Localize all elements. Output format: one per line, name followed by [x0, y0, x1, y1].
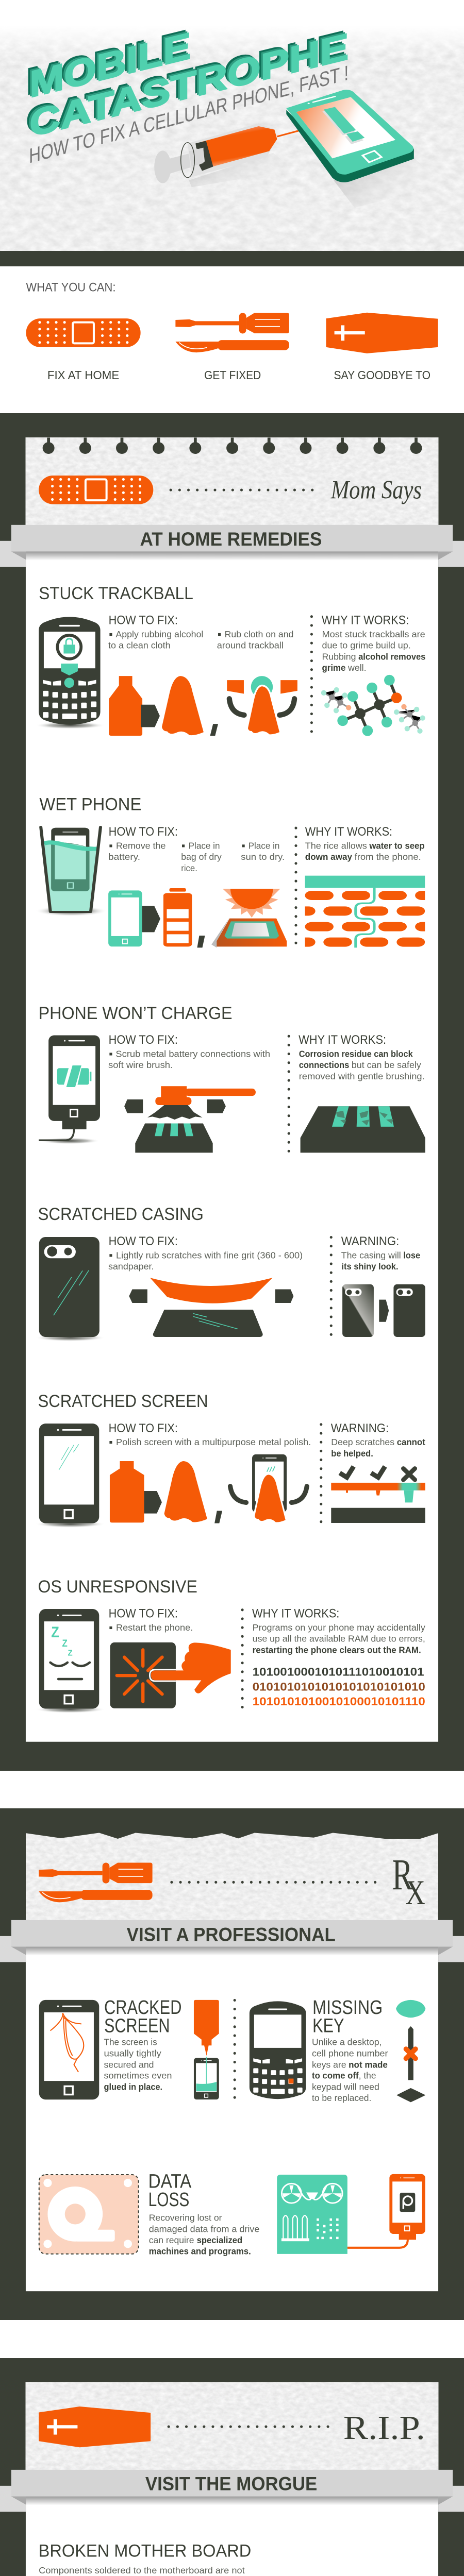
icon: sleeping phone: Z	[51, 1624, 59, 1641]
body text: sometimes even	[104, 2071, 172, 2081]
rx symbol: R	[392, 1850, 413, 1899]
why it works: alcohol removes	[358, 652, 425, 662]
how to fix: Rub cloth on and	[225, 629, 293, 639]
heading: DATA	[148, 2171, 192, 2192]
hero title and illustration	[26, 22, 438, 527]
icon: sandpaper	[129, 1278, 293, 1337]
why it works	[322, 614, 425, 673]
body text: keypad will need	[312, 2081, 379, 2092]
panel texture and sheet	[26, 2382, 438, 2576]
icon: corroded contacts	[301, 1106, 425, 1153]
icon: coffin	[326, 313, 438, 353]
option labels	[47, 368, 430, 382]
icon: orange phone with drive	[389, 2174, 425, 2240]
section group: scratched screen and OS unresponsive	[26, 1392, 438, 1922]
body text: machines and programs.	[149, 2246, 251, 2256]
warning: WARNING:	[331, 1421, 389, 1435]
divider	[309, 617, 314, 733]
warning	[341, 1234, 420, 1272]
how to fix: HOW TO FIX:	[109, 614, 178, 628]
panel: visit a professional	[0, 1850, 464, 2291]
section: data loss	[39, 2171, 425, 2256]
how to fix: HOW TO FIX:	[109, 1421, 178, 1435]
body text: Recovering lost or	[149, 2213, 222, 2223]
banner	[0, 525, 464, 567]
panel: at home remedies	[0, 476, 464, 1742]
why it works: grime	[322, 663, 346, 673]
icon: scratched back of phone	[35, 1237, 105, 1342]
icon: blackberry with lock	[35, 617, 105, 729]
why it works: water to seep	[369, 840, 425, 851]
rx symbol: X	[405, 1873, 425, 1912]
section: scratched screen	[35, 1392, 425, 1528]
title: Mobile Catastrophe: MOBILE	[29, 25, 191, 106]
icon: polish and cloth	[110, 1454, 307, 1523]
warning: Deep scratches	[331, 1437, 394, 1447]
option labels: GET FIXED	[204, 368, 261, 382]
heading	[312, 1997, 383, 2037]
how to fix: Polish screen with a multipurpose metal polish.	[116, 1437, 311, 1447]
mom says script: Mom Says	[330, 476, 422, 504]
icon: phone charging	[39, 1036, 100, 1144]
dotted leader	[172, 1880, 376, 1885]
section: cracked screen	[39, 1997, 219, 2099]
divider	[287, 1036, 291, 1152]
panel 1 white sheet	[26, 551, 438, 1742]
how to fix	[109, 1421, 311, 1447]
how to fix: rice.	[181, 863, 197, 873]
icon: key exploded	[396, 2000, 425, 2102]
icon: tools	[175, 313, 289, 352]
how to fix: sandpaper.	[108, 1261, 154, 1272]
section: phone won't charge	[39, 1004, 425, 1153]
why it works	[299, 1033, 425, 1081]
how to fix: HOW TO FIX:	[109, 1234, 178, 1248]
icon: blackberry missing key	[250, 2001, 306, 2099]
icon: tools	[39, 1862, 153, 1902]
icon: alcohol bottle and cloth	[109, 676, 297, 736]
section: OS unresponsive	[35, 1577, 425, 1713]
cable	[347, 2239, 408, 2248]
heading: MISSING	[312, 1997, 383, 2019]
icon: scratched phone	[35, 1423, 105, 1528]
heading: SCRATCHED CASING	[38, 1205, 204, 1224]
icon: remove battery	[108, 888, 205, 947]
hero background	[0, 0, 464, 251]
icon: bandage	[26, 318, 141, 347]
why it works: WHY IT WORKS:	[305, 825, 392, 839]
banner	[0, 1920, 464, 1962]
icon: hard drive	[39, 2175, 139, 2254]
body text	[312, 2037, 388, 2103]
title: Mobile Catastrophe: MOBILE	[26, 22, 187, 103]
rip: R.I.P.	[343, 2409, 425, 2447]
body text: glued in place.	[104, 2081, 162, 2092]
how to fix: Restart the phone.	[116, 1622, 193, 1633]
body text	[104, 2037, 172, 2092]
binary numbers: 1010010001010111010010101	[253, 1666, 424, 1679]
how to fix: bag of dry	[181, 852, 222, 862]
body text: Unlike a desktop,	[312, 2037, 382, 2047]
heading: SCRATCHED SCREEN	[38, 1392, 208, 1411]
title: Mobile Catastrophe: CATASTROPHE	[26, 23, 345, 142]
why it works: restarting the phone clears out the RAM.	[253, 1645, 421, 1655]
divider	[293, 828, 298, 943]
why it works: connections	[299, 1060, 349, 1070]
banner	[0, 2470, 464, 2512]
section: scratched casing	[35, 1205, 425, 1342]
banner title: VISIT A PROFESSIONAL	[127, 1924, 336, 1945]
dotted leader	[171, 488, 313, 493]
section: wet phone illustrations	[36, 827, 443, 947]
warning: cannot	[397, 1437, 425, 1447]
how to fix: around trackball	[217, 640, 284, 651]
heading: BROKEN MOTHER BOARD	[39, 2541, 251, 2561]
panel: visit the morgue	[0, 2382, 464, 2576]
how to fix	[108, 1234, 303, 1272]
how to fix: Lightly rub scratches with fine grit (360 - 600)	[116, 1250, 303, 1260]
heading: LOSS	[148, 2189, 189, 2211]
why it works: Corrosion residue can block	[299, 1048, 413, 1059]
how to fix	[108, 1033, 270, 1070]
title: Mobile Catastrophe: CATASTROPHE	[29, 25, 349, 145]
heading: KEY	[312, 2015, 344, 2037]
why it works	[252, 1607, 425, 1655]
option labels: FIX AT HOME	[47, 368, 119, 382]
body text: damaged data from a drive	[149, 2224, 259, 2234]
how to fix: Remove the	[116, 840, 166, 851]
body text: to come off	[312, 2071, 359, 2081]
how to fix: to a clean cloth	[108, 640, 171, 651]
divider	[233, 2000, 237, 2098]
binary numbers: 1010101010010100010101110	[253, 1695, 425, 1708]
how to fix: Place in	[248, 840, 279, 851]
warning: be helped.	[331, 1448, 373, 1459]
divider	[319, 1425, 323, 1522]
how to fix: HOW TO FIX:	[109, 825, 178, 839]
heading: OS UNRESPONSIVE	[38, 1577, 197, 1597]
how to fix: Place in	[189, 840, 220, 851]
section: stuck trackball	[35, 584, 425, 736]
divider	[240, 1610, 245, 1708]
warning: its shiny look.	[341, 1261, 399, 1272]
body text: keys are	[312, 2059, 346, 2070]
why it works: but can be safely	[352, 1060, 421, 1070]
warning: The casing will	[341, 1250, 401, 1260]
icon: bandage	[39, 476, 153, 504]
panel 1 top texture	[26, 437, 438, 527]
how to fix: HOW TO FIX:	[109, 1607, 178, 1621]
heading: PHONE WON’T CHARGE	[39, 1004, 233, 1023]
notebook holes	[43, 437, 422, 454]
heading: CRACKED	[104, 1997, 181, 2019]
how to fix: Apply rubbing alcohol	[115, 629, 203, 639]
body text: can require	[149, 2235, 194, 2245]
icon: phone in water glass	[36, 827, 107, 916]
why it works: well.	[347, 663, 367, 673]
body text: not made	[349, 2059, 388, 2070]
title: Mobile Catastrophe: CATASTROPHE	[28, 24, 347, 144]
why it works: The rice allows	[305, 840, 367, 851]
section: missing key	[250, 1997, 425, 2103]
icon: coffin	[39, 2406, 151, 2447]
icon: shiny to dull casing	[342, 1284, 425, 1337]
intro heading: WHAT YOU CAN:	[26, 280, 115, 294]
body text: , the	[359, 2071, 376, 2081]
dotted leader	[169, 2425, 329, 2429]
icon: power button and hand	[110, 1642, 231, 1708]
body text: secured and	[104, 2059, 154, 2070]
icon: cracked phone	[39, 2000, 99, 2099]
why it works: down away	[305, 852, 352, 862]
body text: The screen is	[104, 2037, 157, 2047]
banner title: VISIT THE MORGUE	[145, 2473, 317, 2494]
why it works: removed with gentle brushing.	[299, 1071, 425, 1081]
body text: specialized	[197, 2235, 242, 2245]
icon: sleeping phone	[35, 1609, 105, 1713]
sheet	[26, 1947, 438, 2291]
body text: usually tightly	[104, 2048, 161, 2058]
how to fix	[108, 614, 293, 651]
title: Mobile Catastrophe: MOBILE	[28, 24, 189, 105]
binary numbers: 0101010101010101010101010	[253, 1680, 425, 1693]
why it works: WHY IT WORKS:	[252, 1607, 339, 1621]
heading: STUCK TRACKBALL	[39, 584, 193, 603]
warning: lose	[403, 1250, 420, 1260]
how to fix: soft wire brush.	[108, 1060, 173, 1070]
why it works: use up all the available RAM due to errors,	[253, 1634, 425, 1644]
icon: recovery machine	[277, 2175, 347, 2254]
how to fix	[109, 1607, 193, 1633]
section: wet phone text	[39, 795, 425, 943]
section group: phone won't charge and scratched casing	[35, 1004, 425, 1342]
why it works: WHY IT WORKS:	[322, 614, 409, 628]
syringe and phone illustration	[154, 90, 433, 208]
how to fix: Scrub metal battery connections with	[115, 1048, 270, 1059]
how to fix	[108, 825, 285, 873]
banner title: AT HOME REMEDIES	[140, 529, 322, 550]
why it works: due to grime build up.	[322, 640, 411, 651]
icon: glue bottle	[194, 2000, 219, 2099]
why it works: Most stuck trackballs are	[322, 629, 425, 639]
panel 2 torn top texture	[26, 1832, 438, 1922]
how to fix: battery.	[108, 852, 140, 862]
body text: to be replaced.	[312, 2093, 371, 2103]
icon: sleeping phone: Z	[68, 1649, 73, 1658]
icon: sleeping phone: Z	[62, 1638, 68, 1649]
why it works: from the phone.	[355, 852, 421, 862]
body text: cell phone number	[312, 2048, 388, 2058]
icon: water through rice wall	[305, 876, 425, 948]
icon: scratch depth diagram	[331, 1466, 425, 1523]
option labels: SAY GOODBYE TO	[334, 368, 430, 382]
icon: molecule	[321, 675, 425, 736]
heading	[104, 1997, 181, 2037]
how to fix: HOW TO FIX:	[109, 1033, 178, 1047]
subtitle: HOW TO FIX A CELLULAR PHONE, FAST !	[29, 61, 349, 168]
how to fix: sun to dry.	[241, 852, 285, 862]
warning	[331, 1421, 425, 1459]
icon: sun drying phone	[211, 889, 287, 948]
heading: WET PHONE	[39, 795, 141, 815]
heading	[148, 2171, 192, 2211]
why it works: WHY IT WORKS:	[299, 1033, 386, 1047]
warning: WARNING:	[341, 1234, 399, 1248]
heading: SCREEN	[104, 2015, 170, 2037]
why it works	[305, 825, 425, 862]
divider	[329, 1238, 334, 1335]
icon: brush on contacts	[124, 1086, 256, 1153]
why it works: Rubbing	[322, 652, 356, 662]
why it works: Programs on your phone may accidentally	[253, 1622, 425, 1633]
intro text: Components soldered to the motherboard are not	[39, 2565, 245, 2575]
binary numbers	[253, 1666, 425, 1708]
body text	[149, 2213, 259, 2256]
